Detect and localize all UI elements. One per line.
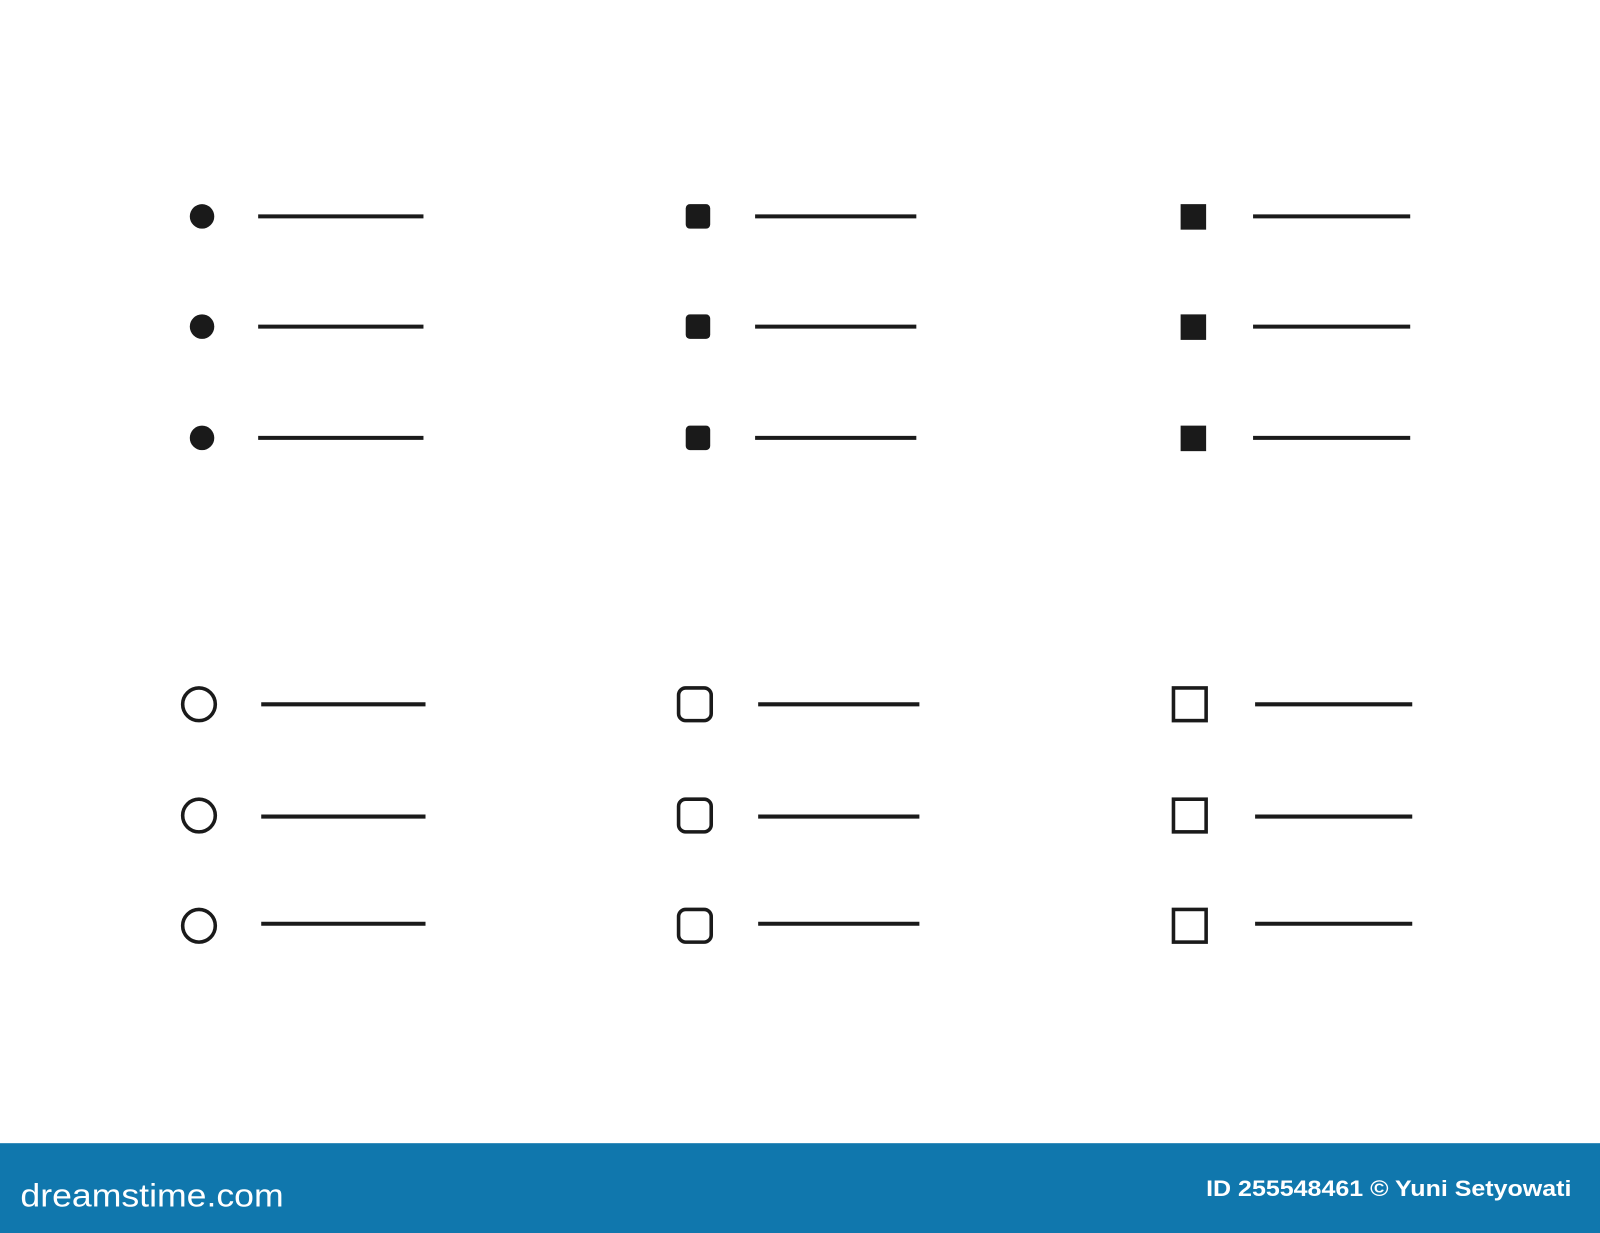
footer bar bbox=[0, 1143, 1600, 1233]
panel: outline rounded square list bbox=[679, 688, 919, 942]
panel: filled circle list bbox=[190, 204, 423, 450]
footer credit text: ID 255548461 © Yuni Setyowati bbox=[1206, 1176, 1571, 1201]
panel: outline circle list bbox=[183, 688, 426, 942]
footer logo text: dreamstime.com bbox=[20, 1176, 284, 1213]
panel: filled square list bbox=[1181, 204, 1410, 451]
panel: outline square list bbox=[1173, 688, 1412, 942]
panel: filled rounded square list bbox=[686, 204, 916, 450]
